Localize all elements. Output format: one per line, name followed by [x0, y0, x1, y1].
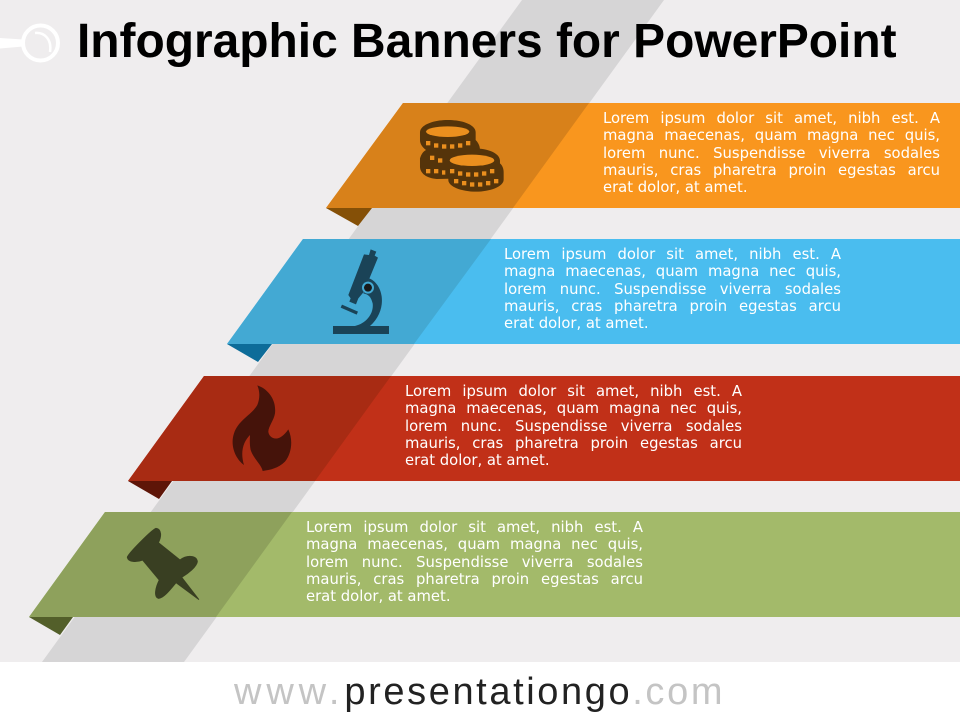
banner 3: red	[128, 376, 960, 499]
text block: green banner: lorem nunc. Suspendisse viverra sodales	[306, 554, 643, 571]
icon: coins	[420, 120, 504, 192]
logo: magnifier ring	[0, 26, 58, 60]
diagonal gray stripe	[42, 0, 664, 662]
text block: blue banner: Lorem ipsum dolor sit amet, nibh est. A	[504, 246, 841, 263]
footer website: www.presentationgo.com	[234, 671, 725, 713]
banner 1: orange	[326, 103, 960, 226]
icon: push pin	[127, 528, 199, 599]
text block: blue banner: magna maecenas, quam magna nec quis,	[504, 263, 841, 280]
title: Infographic Banners for PowerPoint	[77, 15, 897, 68]
text block: red banner	[405, 383, 742, 469]
text block: green banner: erat dolor, at amet.	[306, 588, 451, 605]
text block: orange banner: lorem nunc. Suspendisse viverra sodales	[603, 145, 940, 162]
text block: red banner: magna maecenas, quam magna nec quis,	[405, 400, 742, 417]
text block: green banner: Lorem ipsum dolor sit amet, nibh est. A	[306, 519, 643, 536]
icon: microscope	[333, 249, 389, 334]
text block: orange banner: Lorem ipsum dolor sit amet, nibh est. A	[603, 110, 940, 127]
text block: red banner: Lorem ipsum dolor sit amet, nibh est. A	[405, 383, 742, 400]
text block: red banner: mauris, cras pharetra proin egestas arcu	[405, 435, 742, 452]
text block: blue banner	[504, 246, 841, 332]
text block: red banner: erat dolor, at amet.	[405, 452, 550, 469]
text block: green banner: magna maecenas, quam magna nec quis,	[306, 536, 643, 553]
text block: blue banner: mauris, cras pharetra proin egestas arcu	[504, 298, 841, 315]
text block: green banner	[306, 519, 643, 605]
text block: blue banner: lorem nunc. Suspendisse viverra sodales	[504, 281, 841, 298]
banner 2: blue	[227, 239, 960, 362]
text block: red banner: lorem nunc. Suspendisse viverra sodales	[405, 418, 742, 435]
text block: orange banner	[603, 110, 940, 196]
text block: orange banner: erat dolor, at amet.	[603, 179, 748, 196]
text block: blue banner: erat dolor, at amet.	[504, 315, 649, 332]
icon: flame	[233, 385, 291, 471]
text block: green banner: mauris, cras pharetra proin egestas arcu	[306, 571, 643, 588]
text block: orange banner: mauris, cras pharetra proin egestas arcu	[603, 162, 940, 179]
banner 4: green	[29, 512, 960, 635]
text block: orange banner: magna maecenas, quam magna nec quis,	[603, 127, 940, 144]
